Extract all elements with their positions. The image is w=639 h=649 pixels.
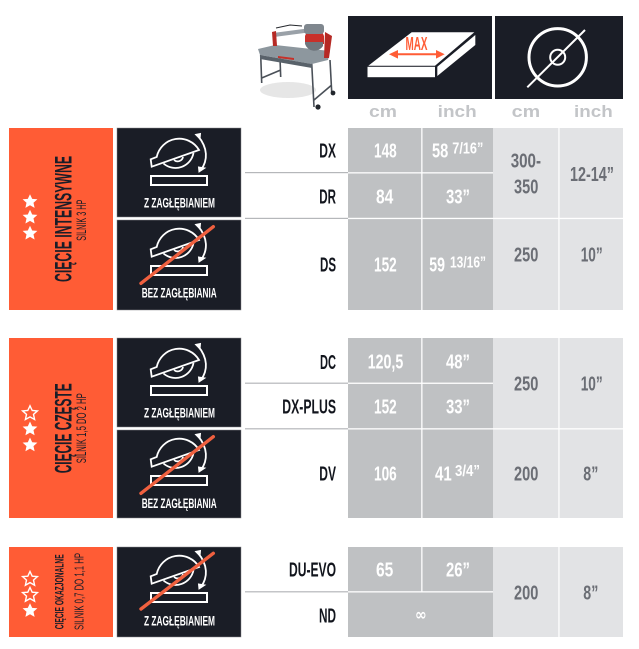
values: disc diameter: 200 <box>514 464 538 486</box>
panel: plunge cut: Z ZAGŁĘBIANIEM <box>144 404 215 420</box>
values: max cut: 148 <box>374 140 397 162</box>
values: disc diameter: 10” <box>581 245 603 267</box>
panel: crossed plunge cut: Z ZAGŁĘBIANIEM <box>144 612 215 628</box>
header panel: disc diameter <box>495 16 623 99</box>
values: disc diameter: 250 <box>514 374 538 396</box>
values: max cut: 13/16” <box>450 255 486 272</box>
motor text: SILNIK 3 HP <box>73 200 89 241</box>
column headers: inch <box>574 102 613 121</box>
panel: occasional cutting category <box>9 547 113 637</box>
values: disc diameter <box>511 151 614 604</box>
icon: one filled two outlined stars <box>23 572 37 617</box>
panel: crossed plunge cut <box>117 547 241 637</box>
model names: DX-PLUS <box>282 396 336 418</box>
values: max cut: 3/4” <box>455 463 480 480</box>
model names <box>282 140 336 628</box>
column headers <box>369 102 613 121</box>
values: disc diameter: 350 <box>514 177 538 199</box>
icon: three filled stars <box>23 194 37 240</box>
panel: no plunge cut: BEZ ZAGŁĘBIANIA <box>142 495 217 511</box>
table: block 1 cells <box>245 128 623 310</box>
panel: plunge cut <box>117 338 241 427</box>
model names: DU-EVO <box>289 560 336 582</box>
column headers: inch <box>438 102 477 121</box>
icon: slab side <box>437 35 475 76</box>
panel: plunge cut: Z ZAGŁĘBIANIEM <box>144 194 215 210</box>
values: max cut <box>368 140 486 624</box>
values: max cut: ∞ <box>415 605 427 624</box>
values: max cut: 58 <box>432 140 448 162</box>
icon: slab top <box>368 32 474 66</box>
values: disc diameter: 12-14” <box>570 164 614 186</box>
icon: tile saw machine <box>258 24 335 110</box>
values: disc diameter: 250 <box>514 245 538 267</box>
icon: two filled one outlined star <box>23 406 37 451</box>
table: block 3 cells <box>245 547 623 637</box>
values: max cut: 106 <box>374 464 397 486</box>
column headers: cm <box>512 102 540 121</box>
values: disc diameter: 8” <box>583 582 598 604</box>
table: block 2 cells <box>245 338 623 518</box>
values: disc diameter: 10” <box>581 374 603 396</box>
panel: no plunge cut <box>117 220 241 310</box>
column headers: cm <box>369 102 397 121</box>
values: max cut: 7/16” <box>452 140 483 157</box>
values: disc diameter: 8” <box>583 464 598 486</box>
values: max cut: 152 <box>374 255 397 277</box>
motor text: SILNIK 1,5 DO 2 HP <box>73 393 89 463</box>
panel: frequent cutting category <box>9 338 113 518</box>
panel: no plunge cut <box>117 430 241 518</box>
model names: DS <box>320 255 336 277</box>
values: max cut: 41 <box>435 464 452 486</box>
values: max cut: 26” <box>446 560 470 582</box>
header panel: max cut slab <box>348 16 492 99</box>
heading: CIĘCIE OKAZJONALNE <box>52 554 66 629</box>
values: max cut: 33” <box>446 186 470 208</box>
heading: CIĘCIE INTENSYWNE <box>51 156 78 282</box>
model names: ND <box>319 606 336 628</box>
values: max cut: 65 <box>376 560 393 582</box>
panel: intensive cutting category <box>9 128 113 310</box>
label: MAX: MAX <box>406 34 428 54</box>
values: disc diameter: 200 <box>514 582 538 604</box>
motor text: SILNIK 0,7 DO 1,1 HP <box>72 553 86 630</box>
panel: no plunge cut: BEZ ZAGŁĘBIANIA <box>142 284 217 300</box>
model names: DC <box>320 352 336 374</box>
values: disc diameter: 300- <box>511 151 541 173</box>
panel: frequent cutting category: CIĘCIE CZĘSTE <box>51 383 78 473</box>
values: max cut: 59 <box>429 255 445 277</box>
model names: DV <box>319 464 336 486</box>
panel: plunge cut <box>117 128 241 217</box>
model names: DR <box>319 186 336 208</box>
values: max cut: 33” <box>446 396 470 418</box>
values: max cut: 48” <box>446 352 470 374</box>
values: max cut: 120,5 <box>368 352 403 374</box>
model names: DX <box>319 140 336 162</box>
values: max cut: 152 <box>374 396 397 418</box>
values: max cut: 84 <box>376 186 394 208</box>
arrow: width <box>389 50 445 59</box>
icon: slab front <box>368 67 435 77</box>
